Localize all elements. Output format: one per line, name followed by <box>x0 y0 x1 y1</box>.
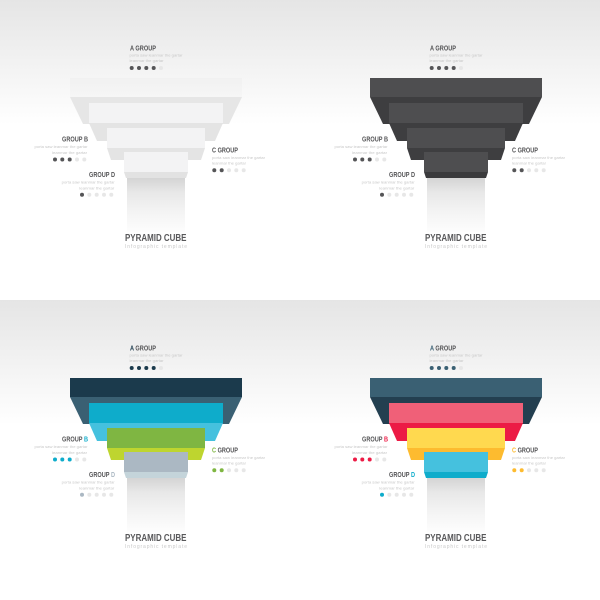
label: C group <box>512 448 566 472</box>
label: C group: C GROUP <box>212 448 238 454</box>
label: group B: porta saw leanmar the gartar <box>34 444 88 449</box>
tier C dark <box>407 128 505 160</box>
label: group B: leanmar the gartar <box>352 450 388 455</box>
tier C white <box>107 128 205 160</box>
label: C group <box>212 448 266 472</box>
label: group D <box>362 172 415 197</box>
label: C group <box>512 148 566 172</box>
label: C group <box>212 148 266 172</box>
panel: white pyramid <box>34 46 266 250</box>
label: C group: leanmar the gartar <box>512 161 547 166</box>
label: group B <box>334 136 388 162</box>
label: A group: porta saw leanmar the gartar <box>130 52 183 58</box>
title: Infographic template <box>425 244 487 250</box>
label: group B <box>334 436 388 462</box>
tier C green <box>107 428 205 460</box>
label: A group: porta saw leanmar the gartar <box>430 52 483 58</box>
label: A group <box>430 346 483 370</box>
tier B cyan <box>89 403 223 441</box>
tier A white <box>70 78 242 124</box>
tier D cyan <box>424 452 488 478</box>
label: group D: leanmar the gartar <box>379 485 415 490</box>
title: Infographic template <box>425 544 487 550</box>
label: group B <box>34 136 88 162</box>
tier A dark <box>370 78 542 124</box>
label: group B: leanmar the gartar <box>52 150 88 155</box>
label: A group: leanmar the gartar <box>430 358 464 363</box>
label: group D: leanmar the gartar <box>79 185 115 190</box>
label: group B: leanmar the gartar <box>352 150 388 155</box>
label: group B: leanmar the gartar <box>52 450 88 455</box>
label: group B: porta saw leanmar the gartar <box>334 144 388 149</box>
title: PYRAMID CUBE <box>125 233 187 244</box>
label: A group <box>130 346 183 370</box>
label: group D: GROUP D <box>89 172 115 179</box>
title: PYRAMID CUBE <box>125 533 187 544</box>
tier A navy <box>70 378 242 424</box>
title <box>125 533 187 550</box>
label: group D: leanmar the gartar <box>379 185 415 190</box>
label: group D: porta saw leanmar the gartar <box>62 180 115 184</box>
label: group B: porta saw leanmar the gartar <box>34 144 88 149</box>
label: A group: porta saw leanmar the gartar <box>430 352 483 358</box>
label: C group: porta saw leanmar the gartar <box>212 155 266 160</box>
label: group D: GROUP D <box>389 472 415 479</box>
title: Infographic template <box>125 544 187 550</box>
label: C group: leanmar the gartar <box>512 461 547 466</box>
tier B white <box>89 103 223 141</box>
label: A group: A GROUP <box>430 46 456 52</box>
label: group B <box>34 436 88 462</box>
label: group B: GROUP B <box>62 436 88 444</box>
label: C group: porta saw leanmar the gartar <box>212 455 266 460</box>
label: C group: leanmar the gartar <box>212 161 247 166</box>
label: C group: leanmar the gartar <box>212 461 247 466</box>
label: group D: leanmar the gartar <box>79 485 115 490</box>
label: A group <box>430 46 483 70</box>
label: C group: porta saw leanmar the gartar <box>512 455 566 460</box>
label: A group: A GROUP <box>130 46 156 52</box>
label: group B: GROUP B <box>362 436 388 444</box>
tier C yellow <box>407 428 505 460</box>
label: C group: porta saw leanmar the gartar <box>512 155 566 160</box>
shadow column <box>427 478 485 536</box>
shadow column <box>127 478 185 536</box>
title: Infographic template <box>125 244 187 250</box>
label: group D: porta saw leanmar the gartar <box>362 180 415 184</box>
tier D dark <box>424 152 488 178</box>
label: A group: leanmar the gartar <box>430 58 464 63</box>
shadow column <box>127 178 185 236</box>
title <box>425 533 487 550</box>
label: A group: A GROUP <box>430 346 456 352</box>
title <box>125 233 187 250</box>
title: PYRAMID CUBE <box>425 233 487 244</box>
label: group D: porta saw leanmar the gartar <box>62 480 115 484</box>
label: group D: porta saw leanmar the gartar <box>362 480 415 484</box>
label: group D <box>62 472 115 497</box>
label: A group: leanmar the gartar <box>130 58 164 63</box>
label: C group: C GROUP <box>212 148 238 154</box>
panel: dark pyramid <box>334 46 566 250</box>
label: group D <box>62 172 115 197</box>
label: A group <box>130 46 183 70</box>
tier A slate <box>370 378 542 424</box>
label: group D <box>362 472 415 497</box>
tier D white <box>124 152 188 178</box>
shadow column <box>427 178 485 236</box>
label: group B: porta saw leanmar the gartar <box>334 444 388 449</box>
label: C group: C GROUP <box>512 148 538 154</box>
tier D grey <box>124 452 188 478</box>
label: group B: GROUP B <box>62 136 88 144</box>
label: A group: porta saw leanmar the gartar <box>130 352 183 358</box>
label: A group: A GROUP <box>130 346 156 352</box>
label: group D: GROUP D <box>389 172 415 179</box>
label: group B: GROUP B <box>362 136 388 144</box>
title: PYRAMID CUBE <box>425 533 487 544</box>
label: group D: GROUP D <box>89 472 115 479</box>
tier B red <box>389 403 523 441</box>
label: C group: C GROUP <box>512 448 538 454</box>
title <box>425 233 487 250</box>
panel: blue green pyramid <box>34 346 266 550</box>
tier B dark <box>389 103 523 141</box>
label: A group: leanmar the gartar <box>130 358 164 363</box>
panel: red yellow pyramid <box>334 346 566 550</box>
